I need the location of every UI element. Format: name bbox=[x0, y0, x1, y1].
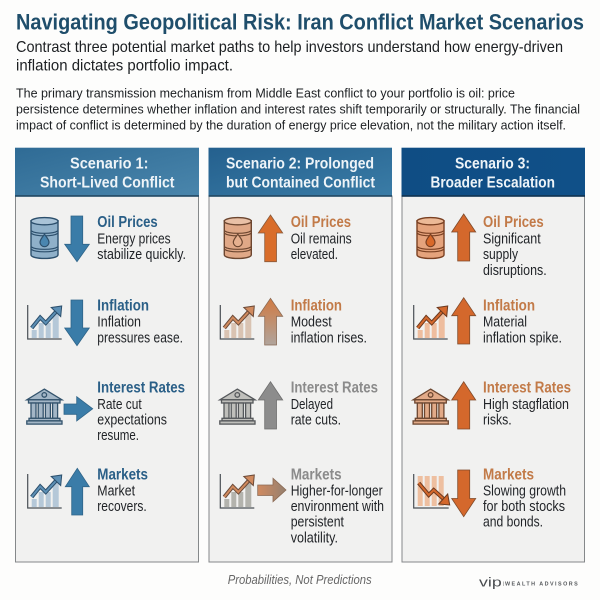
footer caption: Probabilities, Not Predictions bbox=[228, 572, 372, 587]
arrow: markets sideways bbox=[258, 478, 286, 502]
text: interest rates: Interest Rates bbox=[97, 380, 185, 397]
arrow: inflation down bbox=[65, 300, 89, 346]
intro paragraph bbox=[16, 86, 580, 132]
icon: bank, blue bbox=[27, 389, 62, 424]
panel 3 body bbox=[402, 196, 584, 562]
logo: VIP Wealth Advisors bbox=[479, 576, 578, 590]
logo: VIP Wealth Advisors: vip bbox=[479, 576, 502, 590]
icon: bank, orange bbox=[413, 389, 448, 424]
subtitle: inflation dictates portfolio impact. bbox=[16, 58, 233, 75]
subtitle: Contrast three potential market paths to help investors understand how energy-driven bbox=[16, 39, 563, 56]
text: interest rates: Rate cut bbox=[97, 396, 142, 413]
panel 3 header bbox=[402, 148, 585, 197]
panel 3 header: Broader Escalation bbox=[430, 174, 555, 191]
text: inflation: inflation spike. bbox=[483, 329, 562, 346]
text: oil prices bbox=[97, 214, 186, 263]
arrow: interest rates up bbox=[452, 382, 476, 429]
text: oil prices: Oil remains bbox=[291, 231, 352, 248]
arrow: markets up bbox=[65, 468, 89, 515]
subtitle bbox=[16, 39, 563, 75]
icon: markets falling chart, orange bbox=[414, 474, 450, 508]
arrow: inflation up bbox=[452, 298, 476, 344]
text: markets: recovers. bbox=[97, 498, 147, 515]
text: oil prices bbox=[483, 214, 547, 279]
text: markets bbox=[291, 466, 384, 547]
panel 2 header bbox=[208, 148, 392, 197]
text: oil prices: stabilize quickly. bbox=[97, 246, 186, 263]
panel 3 header: Scenario 3: bbox=[455, 155, 530, 172]
text: markets: Slowing growth bbox=[483, 483, 566, 500]
text: oil prices: Significant bbox=[483, 231, 541, 248]
arrow: interest rates up, gray bbox=[258, 382, 283, 429]
text: inflation bbox=[291, 298, 367, 346]
text: markets bbox=[483, 466, 566, 531]
text: markets: persistent bbox=[291, 514, 345, 531]
arrow: inflation up bbox=[258, 298, 283, 345]
arrow: oil prices up bbox=[452, 214, 476, 261]
text: markets: Market bbox=[97, 483, 136, 500]
icon: oil barrel, orange bbox=[417, 218, 444, 258]
text: oil prices: elevated. bbox=[291, 246, 338, 263]
text: inflation: Modest bbox=[291, 314, 332, 331]
text: markets: for both stocks bbox=[483, 498, 565, 515]
text: interest rates: resume. bbox=[97, 427, 139, 444]
text: markets bbox=[97, 466, 148, 515]
text: markets: Markets bbox=[483, 466, 534, 483]
text: interest rates: Interest Rates bbox=[483, 380, 571, 397]
arrow: markets down bbox=[452, 470, 476, 517]
text: markets: Higher-for-longer bbox=[291, 483, 383, 500]
arrow: interest rates sideways bbox=[64, 397, 93, 421]
text: oil prices: Oil Prices bbox=[291, 214, 351, 231]
text: interest rates bbox=[291, 380, 378, 428]
panel: scenario 3 bbox=[402, 148, 585, 562]
text: oil prices: disruptions. bbox=[483, 262, 547, 279]
panel 2 body bbox=[209, 196, 392, 562]
text: inflation: inflation rises. bbox=[291, 329, 367, 346]
text: markets: and bonds. bbox=[483, 514, 543, 531]
text: interest rates bbox=[483, 380, 571, 428]
text: interest rates: rate cuts. bbox=[291, 411, 341, 428]
text: markets: environment with bbox=[291, 498, 384, 515]
text: inflation: Inflation bbox=[97, 314, 141, 331]
panel: scenario 2 bbox=[208, 148, 392, 562]
intro paragraph: The primary transmission mechanism from Middle East conflict to your portfolio is oil: price bbox=[16, 86, 515, 101]
text: inflation: pressures ease. bbox=[97, 329, 183, 346]
panel: scenario 1 bbox=[15, 148, 199, 562]
intro paragraph: persistence determines whether inflation and interest rates shift temporarily or structurally. The financial bbox=[16, 101, 580, 116]
text: inflation: Material bbox=[483, 314, 527, 331]
logo: VIP Wealth Advisors: WEALTH ADVISORS bbox=[505, 582, 578, 588]
text: interest rates: Delayed bbox=[291, 396, 333, 413]
icon: inflation chart, blue bbox=[28, 305, 62, 339]
text: oil prices bbox=[291, 214, 352, 263]
text: markets: volatility. bbox=[291, 530, 338, 547]
text: inflation: Inflation bbox=[97, 298, 149, 315]
text: interest rates: Interest Rates bbox=[291, 380, 378, 397]
icon: markets chart, mixed bbox=[220, 474, 254, 508]
panel 1 header: Scenario 1: bbox=[70, 155, 148, 172]
text: oil prices: supply bbox=[483, 246, 518, 263]
icon: bank, gray bbox=[220, 389, 255, 424]
arrow: oil prices up bbox=[258, 215, 283, 262]
icon: oil barrel, tan bbox=[224, 218, 251, 258]
panel 1 header bbox=[15, 148, 199, 197]
text: oil prices: Oil Prices bbox=[483, 214, 544, 231]
panel 1 body bbox=[16, 196, 198, 562]
icon: inflation chart, orange bbox=[414, 305, 448, 339]
text: inflation: Inflation bbox=[483, 298, 535, 315]
arrow: oil prices down bbox=[65, 216, 89, 262]
text: markets: Markets bbox=[291, 466, 342, 483]
text: oil prices: Oil Prices bbox=[97, 214, 158, 231]
text: interest rates: High stagflation bbox=[483, 396, 569, 413]
panel 1 header: Short-Lived Conflict bbox=[40, 174, 175, 191]
text: markets: Markets bbox=[97, 466, 148, 483]
icon: markets chart, blue bbox=[28, 474, 62, 508]
intro paragraph: impact of conflict is determined by the duration of energy price elevation, not the military action itself. bbox=[16, 117, 566, 132]
text: inflation bbox=[97, 298, 183, 346]
icon: oil barrel, blue bbox=[31, 218, 58, 258]
panel 2 header: but Contained Conflict bbox=[226, 174, 376, 191]
panel 2 header: Scenario 2: Prolonged bbox=[226, 155, 374, 172]
text: inflation: Inflation bbox=[291, 298, 342, 315]
text: oil prices: Energy prices bbox=[97, 231, 171, 248]
text: interest rates: expectations bbox=[97, 411, 167, 428]
text: interest rates: risks. bbox=[483, 411, 512, 428]
icon: inflation chart, tan bbox=[220, 305, 254, 339]
text: interest rates bbox=[97, 380, 185, 444]
text: inflation bbox=[483, 298, 562, 346]
